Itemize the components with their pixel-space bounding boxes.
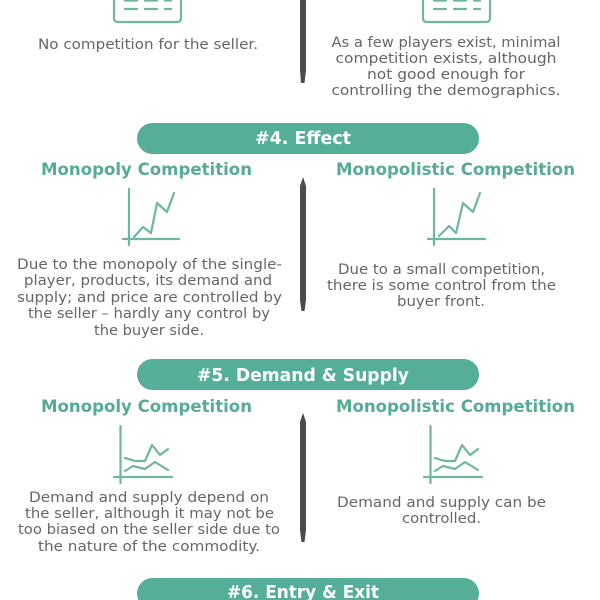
icon: line chart, right — [428, 189, 485, 245]
icon: line chart, left — [123, 189, 179, 245]
text: demand, left — [18, 490, 280, 555]
text: competition, left: No competition for the seller. — [38, 37, 258, 53]
text: competition, right: not good enough for — [367, 67, 525, 83]
text: competition, right — [332, 35, 560, 99]
heading: Monopoly Competition, section 4: Monopoly Competition — [41, 160, 252, 180]
divider: section 4 — [300, 177, 306, 311]
text: demand, right: controlled. — [402, 511, 481, 527]
heading pill: #5. Demand & Supply: #5. Demand & Supply — [197, 365, 409, 386]
heading pill: #4. Effect — [137, 123, 479, 154]
text: effect, right: buyer front. — [397, 294, 485, 310]
divider: section 5 — [300, 413, 306, 542]
text: effect, right: there is some control from the — [327, 278, 556, 294]
heading: Monopolistic Competition, section 4: Monopolistic Competition — [336, 160, 575, 180]
text: competition, right: controlling the demographics. — [332, 83, 560, 99]
text: demand, left: too biased on the seller side due to — [18, 522, 280, 538]
icon: two line chart, right — [424, 426, 482, 483]
icon: table, left — [114, 0, 181, 22]
text: effect, right: Due to a small competition, — [338, 262, 545, 278]
text: effect, right — [327, 262, 556, 310]
text: effect, left: supply; and price are controlled by — [17, 290, 282, 306]
heading: Monopoly Competition, section 5: Monopoly Competition — [41, 397, 252, 417]
text: demand, left: the nature of the commodity. — [38, 539, 260, 555]
text: demand, left: the seller, although it may not be — [25, 506, 274, 522]
text: demand, right: Demand and supply can be — [337, 495, 546, 511]
text: effect, left: Due to the monopoly of the single- — [17, 257, 282, 273]
text: effect, left — [17, 257, 282, 339]
heading: Monopolistic Competition, section 5: Monopolistic Competition — [336, 397, 575, 417]
heading pill: #5. Demand & Supply — [137, 359, 479, 390]
heading pill: #4. Effect: #4. Effect — [255, 128, 351, 149]
text: effect, left: the buyer side. — [94, 323, 204, 339]
text: competition, right: As a few players exist, minimal — [332, 35, 560, 51]
text: effect, left: player, products, its demand and — [24, 273, 272, 289]
text: demand, right — [337, 495, 546, 527]
text: effect, left: the seller – hardly any control by — [28, 306, 270, 322]
text: demand, left: Demand and supply depend on — [29, 490, 269, 506]
text: competition, right: competition exists, although — [336, 51, 556, 67]
heading pill: #6. Entry & Exit — [137, 578, 479, 600]
divider: section 3 — [300, 0, 306, 83]
icon: table, right — [423, 0, 490, 22]
icon: two line chart, left — [114, 426, 172, 483]
